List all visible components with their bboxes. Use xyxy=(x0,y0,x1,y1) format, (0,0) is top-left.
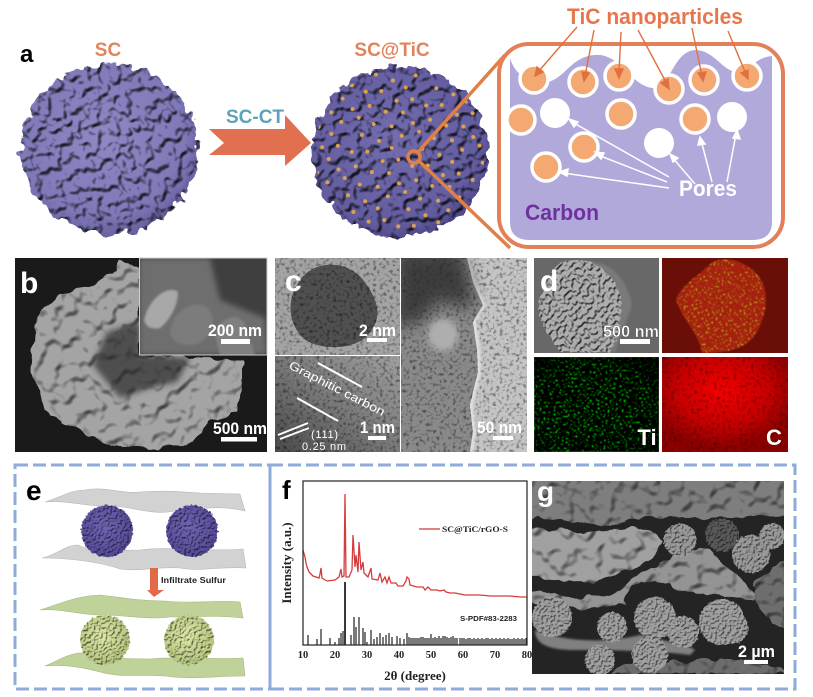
lattice labels: 0.25 nm xyxy=(302,441,346,453)
scale 50 nm: 50 nm xyxy=(477,419,522,437)
shadowed sphere xyxy=(706,518,738,552)
scale 2 nm: 2 nm xyxy=(359,322,396,340)
x tick labels: 60 xyxy=(458,650,468,661)
XRD trace xyxy=(303,494,527,597)
lower spheres xyxy=(532,597,748,675)
inset xyxy=(139,258,267,355)
SC sphere xyxy=(21,64,199,234)
green sheets xyxy=(40,595,245,678)
scale 200 nm: 200 nm xyxy=(208,322,262,340)
label Carbon: Carbon xyxy=(525,200,599,225)
label b: b xyxy=(20,267,38,300)
heading SC@TiC: SC@TiC xyxy=(354,40,430,61)
panel d: elemental maps xyxy=(534,258,788,452)
graphitic carbon markers xyxy=(297,363,362,421)
panel a: synthesis schematic xyxy=(20,4,783,248)
scale 50 nm xyxy=(478,422,521,440)
carbon matrix xyxy=(510,50,772,240)
SEM of particle xyxy=(534,258,659,353)
infiltration arrow xyxy=(147,568,164,597)
upper spheres xyxy=(664,523,785,573)
label C: C xyxy=(766,425,782,450)
central sheet xyxy=(525,550,760,610)
scale 2 µm: 2 µm xyxy=(738,643,775,661)
label Pores: Pores xyxy=(679,176,737,201)
x tick labels xyxy=(298,650,532,661)
label Infiltrate Sulfur: Infiltrate Sulfur xyxy=(161,575,227,585)
process arrow xyxy=(209,115,311,166)
label g: g xyxy=(537,476,554,507)
particle arrows xyxy=(535,27,748,89)
right lower sheet xyxy=(753,561,784,628)
lattice labels: (111) xyxy=(311,429,338,441)
heading SC: SC xyxy=(95,40,121,61)
pores xyxy=(540,98,747,158)
C map xyxy=(662,357,788,452)
x tick labels: 70 xyxy=(490,650,500,661)
x tick labels: 30 xyxy=(362,650,372,661)
lattice labels xyxy=(302,430,346,450)
scale 500 nm: 500 nm xyxy=(213,420,267,438)
green spheres xyxy=(80,615,214,665)
connecting strip xyxy=(535,630,695,655)
y axis title: Intensity (a.u.) xyxy=(279,522,294,604)
left sheet xyxy=(525,527,665,582)
lattice spacing xyxy=(278,423,309,439)
zoom panel: carbon cross-section xyxy=(499,44,783,247)
x tick labels: 10 xyxy=(298,650,308,661)
grey rGO sheets xyxy=(42,489,246,570)
label c: c xyxy=(285,265,302,298)
purple spheres xyxy=(81,505,218,557)
x tick labels: 80 xyxy=(522,650,532,661)
reference label: S-PDF#83-2283 xyxy=(460,614,517,623)
HRTEM lattice xyxy=(275,356,400,453)
panel c: TEM images xyxy=(275,250,527,453)
label e: e xyxy=(26,475,42,506)
reference sticks xyxy=(308,582,526,645)
Ti map xyxy=(534,357,659,452)
x axis title: 2θ (degree) xyxy=(384,668,446,683)
top sheet xyxy=(532,481,784,526)
heading TiC nanoparticles: TiC nanoparticles xyxy=(567,4,743,29)
label Ti: Ti xyxy=(637,425,657,450)
bottom sheet xyxy=(610,659,790,674)
pore arrows xyxy=(559,119,740,188)
chart frame xyxy=(303,481,527,645)
graphitic carbon label: Graphitic carbon xyxy=(287,358,387,419)
scale 1 nm: 1 nm xyxy=(360,419,395,437)
overlay map xyxy=(662,258,788,353)
SC@TiC sphere xyxy=(312,66,488,238)
label a: a xyxy=(20,41,34,68)
TEM edge view xyxy=(395,250,527,452)
TiC particles xyxy=(507,62,761,181)
label SC-CT: SC-CT xyxy=(226,107,284,128)
zoom callout lines xyxy=(408,55,510,248)
label f: f xyxy=(282,475,291,505)
legend: SC@TiC/rGO-S xyxy=(442,524,508,534)
legend xyxy=(419,524,508,534)
panel b: SEM image xyxy=(15,258,267,452)
panel e: sulfur infiltration xyxy=(26,475,246,678)
label d: d xyxy=(540,265,558,298)
x tick labels: 40 xyxy=(394,650,404,661)
scale 2 µm xyxy=(738,646,774,664)
panel g: SEM of composite xyxy=(525,475,790,675)
particle in SEM xyxy=(32,260,242,450)
dashed frames xyxy=(15,465,795,689)
scale 500 nm: 500 nm xyxy=(603,323,659,341)
panel f: XRD chart xyxy=(279,475,532,683)
x tick labels: 50 xyxy=(426,650,436,661)
x tick labels: 20 xyxy=(330,650,340,661)
TEM nanoparticle xyxy=(275,258,400,355)
